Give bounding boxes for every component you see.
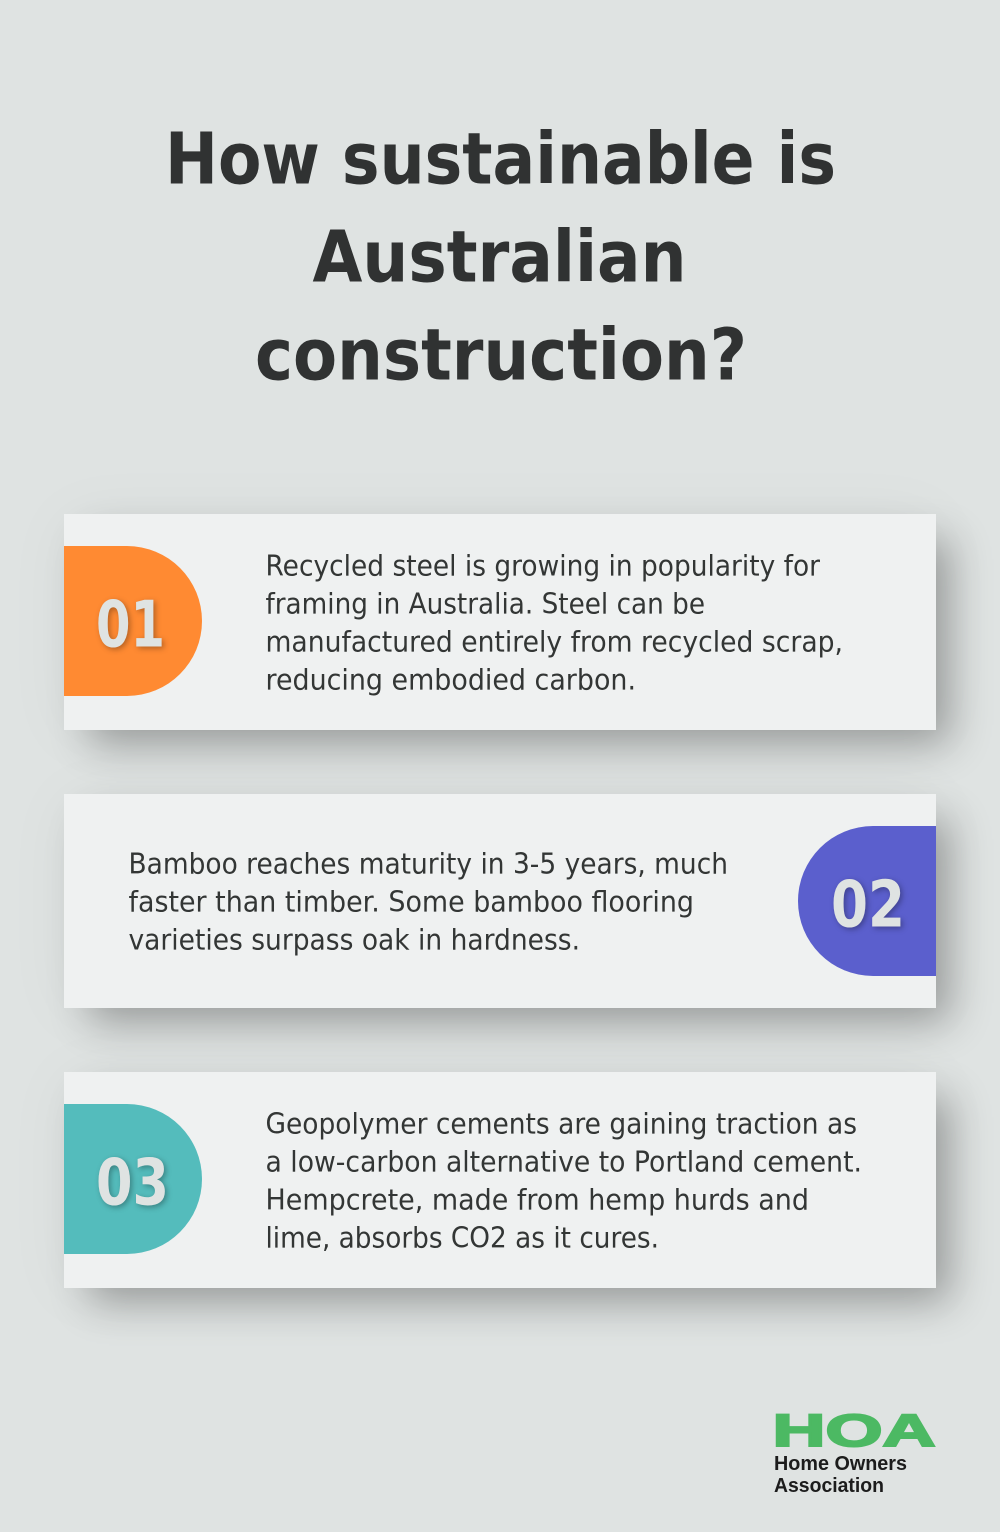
title: Australian	[312, 216, 686, 298]
number: 02: 02	[831, 868, 905, 942]
panel: card 01 recycled steel	[64, 514, 936, 730]
text: card 02 body: varieties surpass oak in hardness.	[128, 924, 580, 956]
panel: card 03 geopolymer and hempcrete	[64, 1072, 936, 1288]
text: card 01 body: reducing embodied carbon.	[266, 664, 636, 696]
text: card 01 body: Recycled steel is growing in popularity for	[266, 550, 820, 582]
text: card 03 body: Geopolymer cements are gaining traction as	[266, 1108, 857, 1140]
text: card 03 body	[266, 1108, 862, 1254]
title: construction?	[255, 314, 747, 396]
text: card 01 body: manufactured entirely from recycled scrap,	[266, 626, 843, 658]
logo: HOA Home Owners Association: Home Owners	[774, 1453, 907, 1475]
panel: card 02 bamboo	[64, 794, 936, 1008]
text: card 03 body: Hempcrete, made from hemp hurds and	[266, 1184, 809, 1216]
badge: 03	[64, 1104, 202, 1254]
logo: HOA Home Owners Association: HOA	[772, 1405, 936, 1456]
text: card 02 body: faster than timber. Some bamboo flooring	[128, 886, 694, 918]
text: card 02 body: Bamboo reaches maturity in 3-5 years, much	[128, 848, 728, 880]
title: How sustainable is	[165, 118, 836, 200]
logo: HOA Home Owners Association: Association	[774, 1475, 884, 1497]
badge: 02	[798, 826, 936, 976]
badge: 01	[64, 546, 202, 696]
title	[165, 118, 836, 396]
text: card 01 body: framing in Australia. Steel can be	[266, 588, 705, 620]
text: card 01 body	[266, 550, 843, 696]
text: card 02 body	[128, 848, 728, 956]
text: card 03 body: a low-carbon alternative to Portland cement.	[266, 1146, 862, 1178]
number: 03: 03	[96, 1146, 169, 1220]
text: card 03 body: lime, absorbs CO2 as it cures.	[266, 1222, 659, 1254]
number: 01: 01	[96, 588, 165, 662]
